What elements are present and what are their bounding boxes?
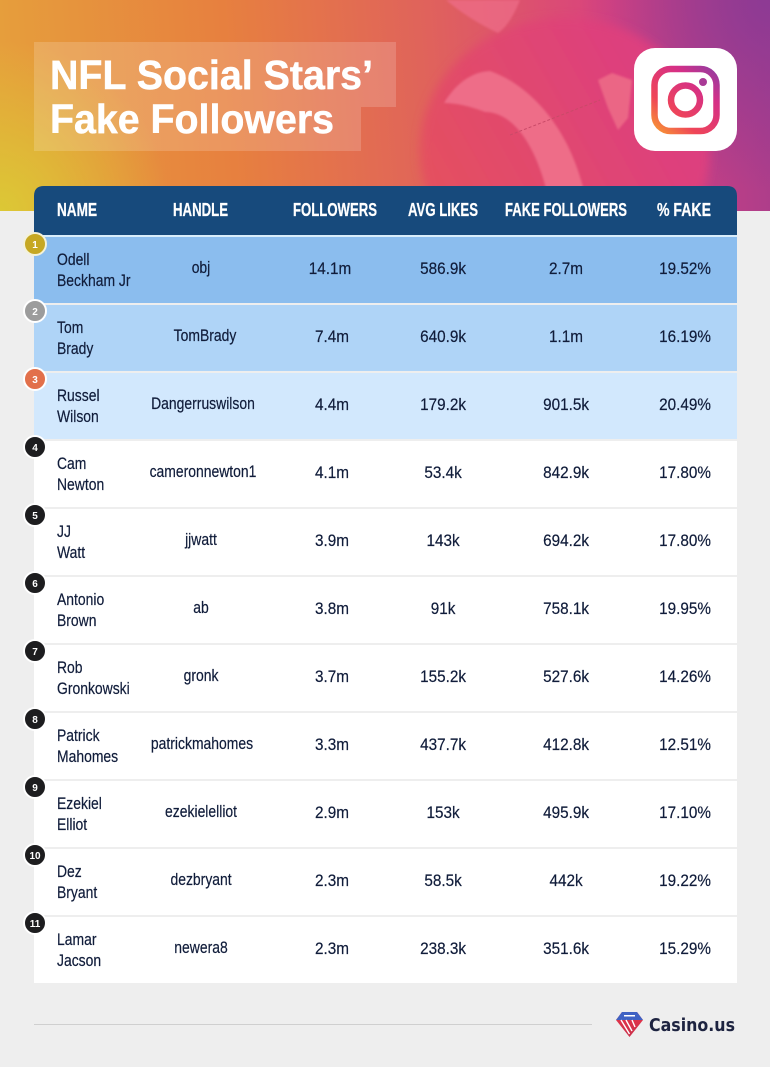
row 9: Ezekiel Elliot — [34, 781, 737, 847]
row 1: Odell Beckham Jr: obj — [192, 259, 210, 277]
row 8: Patrick Mahomes: 3.3m — [315, 735, 349, 754]
row 3: Russel Wilson: Wilson — [57, 408, 99, 426]
row 4: Cam Newton: 17.80% — [659, 463, 711, 482]
table header: NAME — [57, 200, 97, 220]
row 10: Dez Bryant: dezbryant — [170, 871, 232, 889]
row 11: Lamar Jacson: newera8 — [174, 939, 228, 957]
row 4: Cam Newton: 4.1m — [315, 463, 349, 482]
row 2: Tom Brady — [34, 305, 737, 371]
table header: AVG LIKES — [408, 200, 478, 220]
table header: HANDLE — [173, 200, 228, 220]
row 8: Patrick Mahomes: Mahomes — [57, 748, 118, 766]
row 4: Cam Newton: Newton — [57, 476, 104, 494]
row 4: Cam Newton: 842.9k — [543, 463, 590, 482]
row 9: Ezekiel Elliot: 2.9m — [315, 803, 349, 822]
row 6: Antonio Brown: 19.95% — [659, 599, 711, 618]
footer logo: Casino.us — [616, 1012, 735, 1037]
rank badges: 7 — [32, 647, 38, 658]
row 2: Tom Brady: Brady — [57, 340, 94, 358]
row 10: Dez Bryant: 58.5k — [424, 871, 463, 890]
row 11: Lamar Jacson: 351.6k — [543, 939, 590, 958]
row 5: JJ Watt: 694.2k — [543, 531, 590, 550]
icon: diamond shield — [616, 1012, 643, 1037]
row 2: Tom Brady: 7.4m — [315, 327, 349, 346]
table header — [34, 186, 737, 235]
title: NFL Social Stars’ — [50, 52, 373, 98]
row 2: Tom Brady: TomBrady — [174, 327, 237, 345]
row 8: Patrick Mahomes: Patrick — [57, 727, 100, 745]
row 2: Tom Brady: 16.19% — [659, 327, 711, 346]
row 3: Russel Wilson: 20.49% — [659, 395, 711, 414]
row 7: Rob Gronkowski — [34, 645, 737, 711]
row 7: Rob Gronkowski: Gronkowski — [57, 680, 130, 698]
row 10: Dez Bryant: Bryant — [57, 884, 98, 902]
row 11: Lamar Jacson: Lamar — [57, 931, 96, 949]
row 8: Patrick Mahomes: 437.7k — [420, 735, 467, 754]
row 5: JJ Watt: Watt — [57, 544, 86, 562]
title: Fake Followers — [50, 96, 334, 142]
row 4: Cam Newton — [34, 441, 737, 507]
row 3: Russel Wilson: Dangerruswilson — [151, 395, 255, 413]
row 5: JJ Watt: 17.80% — [659, 531, 711, 550]
rank badges — [24, 233, 46, 934]
row 3: Russel Wilson: 901.5k — [543, 395, 590, 414]
row 7: Rob Gronkowski: 14.26% — [659, 667, 711, 686]
row 8: Patrick Mahomes: 12.51% — [659, 735, 711, 754]
row 8: Patrick Mahomes: patrickmahomes — [151, 735, 253, 753]
row 1: Odell Beckham Jr: Beckham Jr — [57, 272, 131, 290]
row 6: Antonio Brown: 91k — [431, 599, 456, 618]
row 6: Antonio Brown: 3.8m — [315, 599, 349, 618]
row 9: Ezekiel Elliot: 495.9k — [543, 803, 590, 822]
row 5: JJ Watt: 143k — [426, 531, 460, 550]
row 6: Antonio Brown: 758.1k — [543, 599, 590, 618]
row 6: Antonio Brown — [34, 577, 737, 643]
row 10: Dez Bryant — [34, 849, 737, 915]
row 5: JJ Watt — [34, 509, 737, 575]
row 1: Odell Beckham Jr: 2.7m — [549, 259, 583, 278]
row 6: Antonio Brown: ab — [193, 599, 209, 617]
row 10: Dez Bryant: 19.22% — [659, 871, 711, 890]
row 8: Patrick Mahomes — [34, 713, 737, 779]
row 3: Russel Wilson: 179.2k — [420, 395, 467, 414]
row 1: Odell Beckham Jr: 586.9k — [420, 259, 467, 278]
footer logo: Casino.us: Casino.us — [649, 1016, 735, 1036]
rank badges: 10 — [29, 851, 41, 862]
row 10: Dez Bryant: Dez — [57, 863, 82, 881]
row 6: Antonio Brown: Brown — [57, 612, 96, 630]
table — [34, 186, 737, 983]
row 9: Ezekiel Elliot: Elliot — [57, 816, 88, 834]
row 5: JJ Watt: 3.9m — [315, 531, 349, 550]
row 3: Russel Wilson — [34, 373, 737, 439]
row 1: Odell Beckham Jr: Odell — [57, 251, 90, 269]
row 7: Rob Gronkowski: gronk — [184, 667, 219, 685]
rank badges: 9 — [32, 783, 38, 794]
rank badges: 6 — [32, 579, 38, 590]
row 5: JJ Watt: jjwatt — [184, 531, 217, 549]
row 11: Lamar Jacson — [34, 917, 737, 983]
table header: % FAKE — [657, 200, 711, 220]
row 6: Antonio Brown: Antonio — [57, 591, 104, 609]
row 2: Tom Brady: 1.1m — [549, 327, 583, 346]
row 9: Ezekiel Elliot: ezekielelliot — [165, 803, 238, 821]
rank badges: 3 — [32, 375, 38, 386]
row 8: Patrick Mahomes: 412.8k — [543, 735, 590, 754]
table header: FOLLOWERS — [293, 200, 377, 220]
row 9: Ezekiel Elliot: Ezekiel — [57, 795, 102, 813]
rank badges: 11 — [30, 919, 41, 930]
rank badges: 1 — [32, 240, 38, 251]
rank badges: 4 — [32, 443, 38, 454]
row 1: Odell Beckham Jr — [34, 237, 737, 303]
row 11: Lamar Jacson: 238.3k — [420, 939, 467, 958]
row 10: Dez Bryant: 442k — [549, 871, 583, 890]
rank badges: 2 — [32, 307, 38, 318]
row 1: Odell Beckham Jr: 19.52% — [659, 259, 711, 278]
row 5: JJ Watt: JJ — [57, 523, 71, 541]
row 4: Cam Newton: Cam — [57, 455, 86, 473]
header banner with football photo — [0, 0, 770, 211]
rank badges: 8 — [32, 715, 38, 726]
table header: FAKE FOLLOWERS — [505, 200, 627, 220]
row 7: Rob Gronkowski: 155.2k — [420, 667, 467, 686]
title — [34, 42, 396, 151]
row 7: Rob Gronkowski: 3.7m — [315, 667, 349, 686]
row 7: Rob Gronkowski: Rob — [57, 659, 83, 677]
icon: instagram logo — [634, 48, 737, 151]
row 7: Rob Gronkowski: 527.6k — [543, 667, 590, 686]
row 11: Lamar Jacson: 15.29% — [659, 939, 711, 958]
row 1: Odell Beckham Jr: 14.1m — [309, 259, 351, 278]
row 4: Cam Newton: 53.4k — [424, 463, 463, 482]
row 2: Tom Brady: 640.9k — [420, 327, 467, 346]
row 11: Lamar Jacson: Jacson — [57, 952, 101, 970]
row 3: Russel Wilson: 4.4m — [315, 395, 349, 414]
row 11: Lamar Jacson: 2.3m — [315, 939, 349, 958]
row 3: Russel Wilson: Russel — [57, 387, 100, 405]
row 2: Tom Brady: Tom — [57, 319, 83, 337]
rank badges: 5 — [32, 511, 38, 522]
row 9: Ezekiel Elliot: 153k — [426, 803, 460, 822]
row 10: Dez Bryant: 2.3m — [315, 871, 349, 890]
row 9: Ezekiel Elliot: 17.10% — [659, 803, 711, 822]
row 4: Cam Newton: cameronnewton1 — [150, 463, 256, 481]
